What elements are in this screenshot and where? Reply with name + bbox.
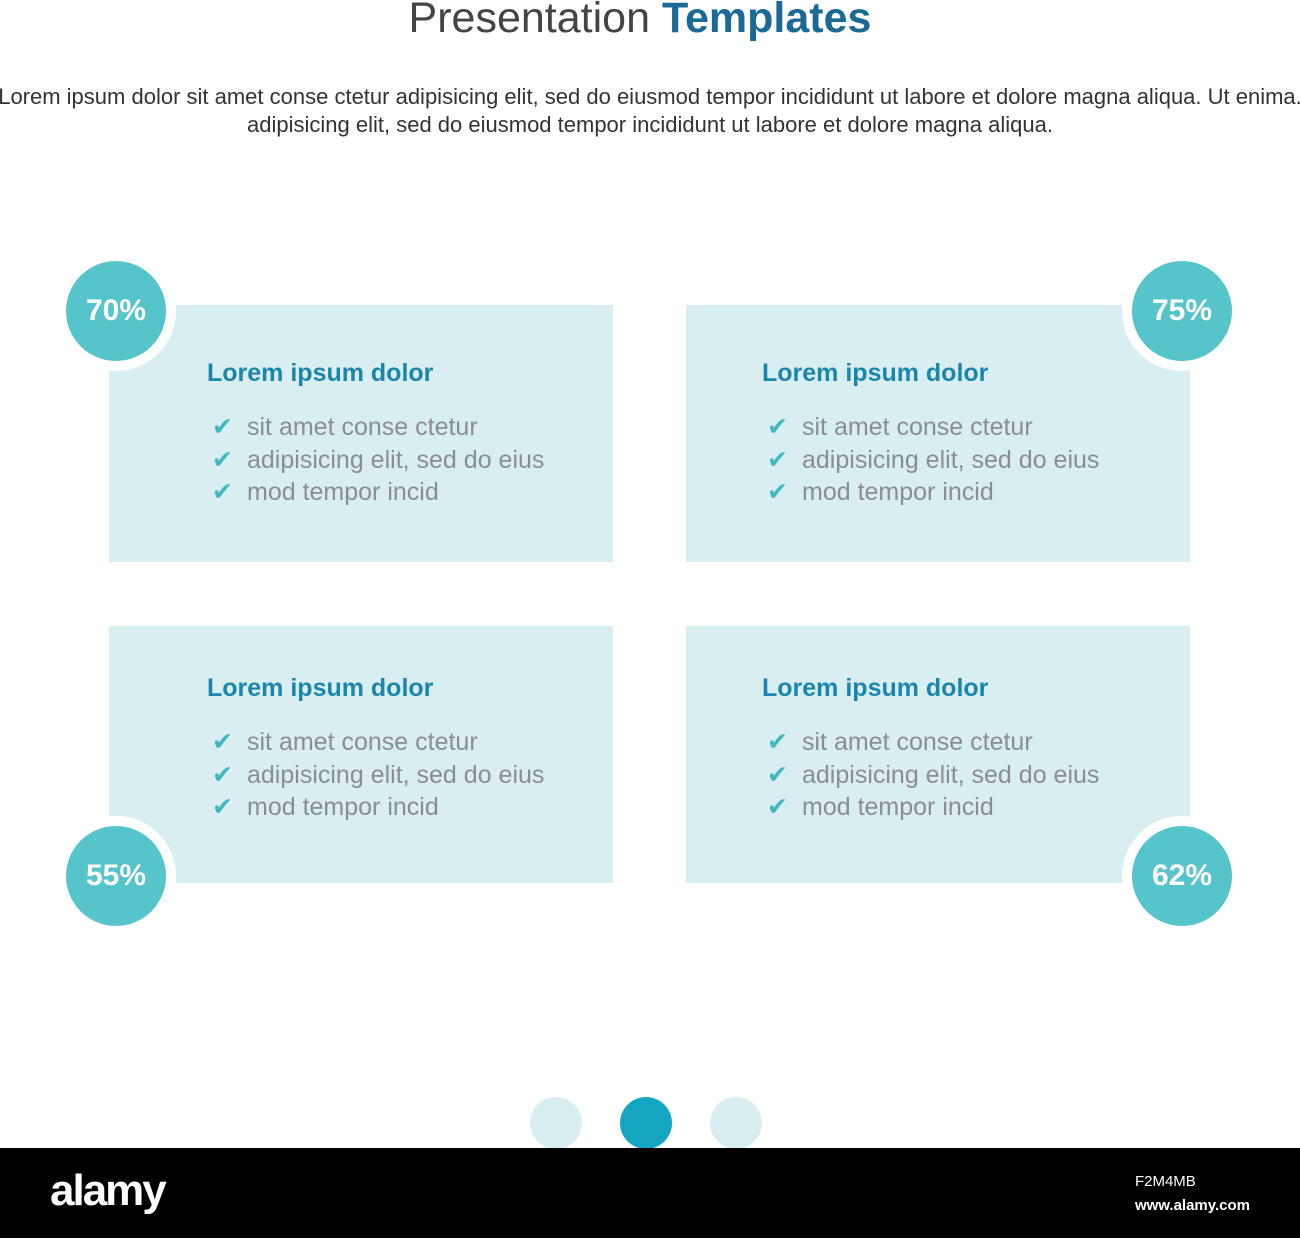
- list: sit amet conse ctetur: [802, 413, 1033, 441]
- subtitle text: adipisicing elit, sed do eiusmod tempor incididunt ut labore et dolore magna aliqua.: [247, 112, 1053, 137]
- list: sit amet conse ctetur: [247, 728, 478, 756]
- badge 75%: 75%: [1152, 294, 1212, 327]
- list: mod tempor incid: [247, 478, 439, 506]
- list: sit amet conse ctetur: [247, 413, 478, 441]
- list: ✔: [212, 478, 233, 506]
- list: mod tempor incid: [802, 478, 994, 506]
- heading: Lorem ipsum dolor: [762, 674, 988, 702]
- list: ✔: [212, 728, 233, 756]
- footer id: F2M4MB: [1135, 1173, 1196, 1190]
- list: ✔: [767, 478, 788, 506]
- list: sit amet conse ctetur: [802, 728, 1033, 756]
- pagination dots: [530, 1097, 762, 1148]
- list: adipisicing elit, sed do eius: [247, 760, 544, 788]
- list: adipisicing elit, sed do eius: [247, 446, 544, 474]
- list: ✔: [767, 446, 788, 474]
- badge 62%: 62%: [1152, 859, 1212, 892]
- list: mod tempor incid: [247, 793, 439, 821]
- footer id: [1135, 1173, 1250, 1214]
- list: [212, 728, 544, 821]
- badge 62%: [1122, 816, 1242, 936]
- badge 55%: [56, 816, 176, 936]
- badge 55%: 55%: [86, 859, 146, 892]
- panel: top right: [686, 305, 1190, 562]
- subtitle text: [0, 84, 1300, 137]
- badge 70%: [56, 251, 176, 371]
- list: [767, 413, 1099, 506]
- heading: Lorem ipsum dolor: [207, 359, 433, 387]
- list: adipisicing elit, sed do eius: [802, 760, 1099, 788]
- list: [212, 413, 544, 506]
- footer bar: [0, 1148, 1300, 1238]
- panel: bottom left: [109, 626, 613, 883]
- list: ✔: [212, 446, 233, 474]
- panel: bottom right: [686, 626, 1190, 883]
- footer id: www.alamy.com: [1135, 1197, 1250, 1214]
- list: adipisicing elit, sed do eius: [802, 446, 1099, 474]
- list: ✔: [767, 760, 788, 788]
- footer logo: alamy: [50, 1166, 165, 1215]
- panel: top left: [109, 305, 613, 562]
- list: ✔: [212, 793, 233, 821]
- list: ✔: [767, 413, 788, 441]
- heading: Lorem ipsum dolor: [762, 359, 988, 387]
- list: [767, 728, 1099, 821]
- list: ✔: [212, 413, 233, 441]
- list: mod tempor incid: [802, 793, 994, 821]
- badge 70%: 70%: [86, 294, 146, 327]
- list: ✔: [212, 760, 233, 788]
- list: ✔: [767, 793, 788, 821]
- heading: Lorem ipsum dolor: [207, 674, 433, 702]
- list: ✔: [767, 728, 788, 756]
- badge 75%: [1122, 251, 1242, 371]
- subtitle text: Lorem ipsum dolor sit amet conse ctetur adipisicing elit, sed do eiusmod tempor incididunt ut labore et dolore magna aliqua. Ut enima.: [0, 84, 1300, 109]
